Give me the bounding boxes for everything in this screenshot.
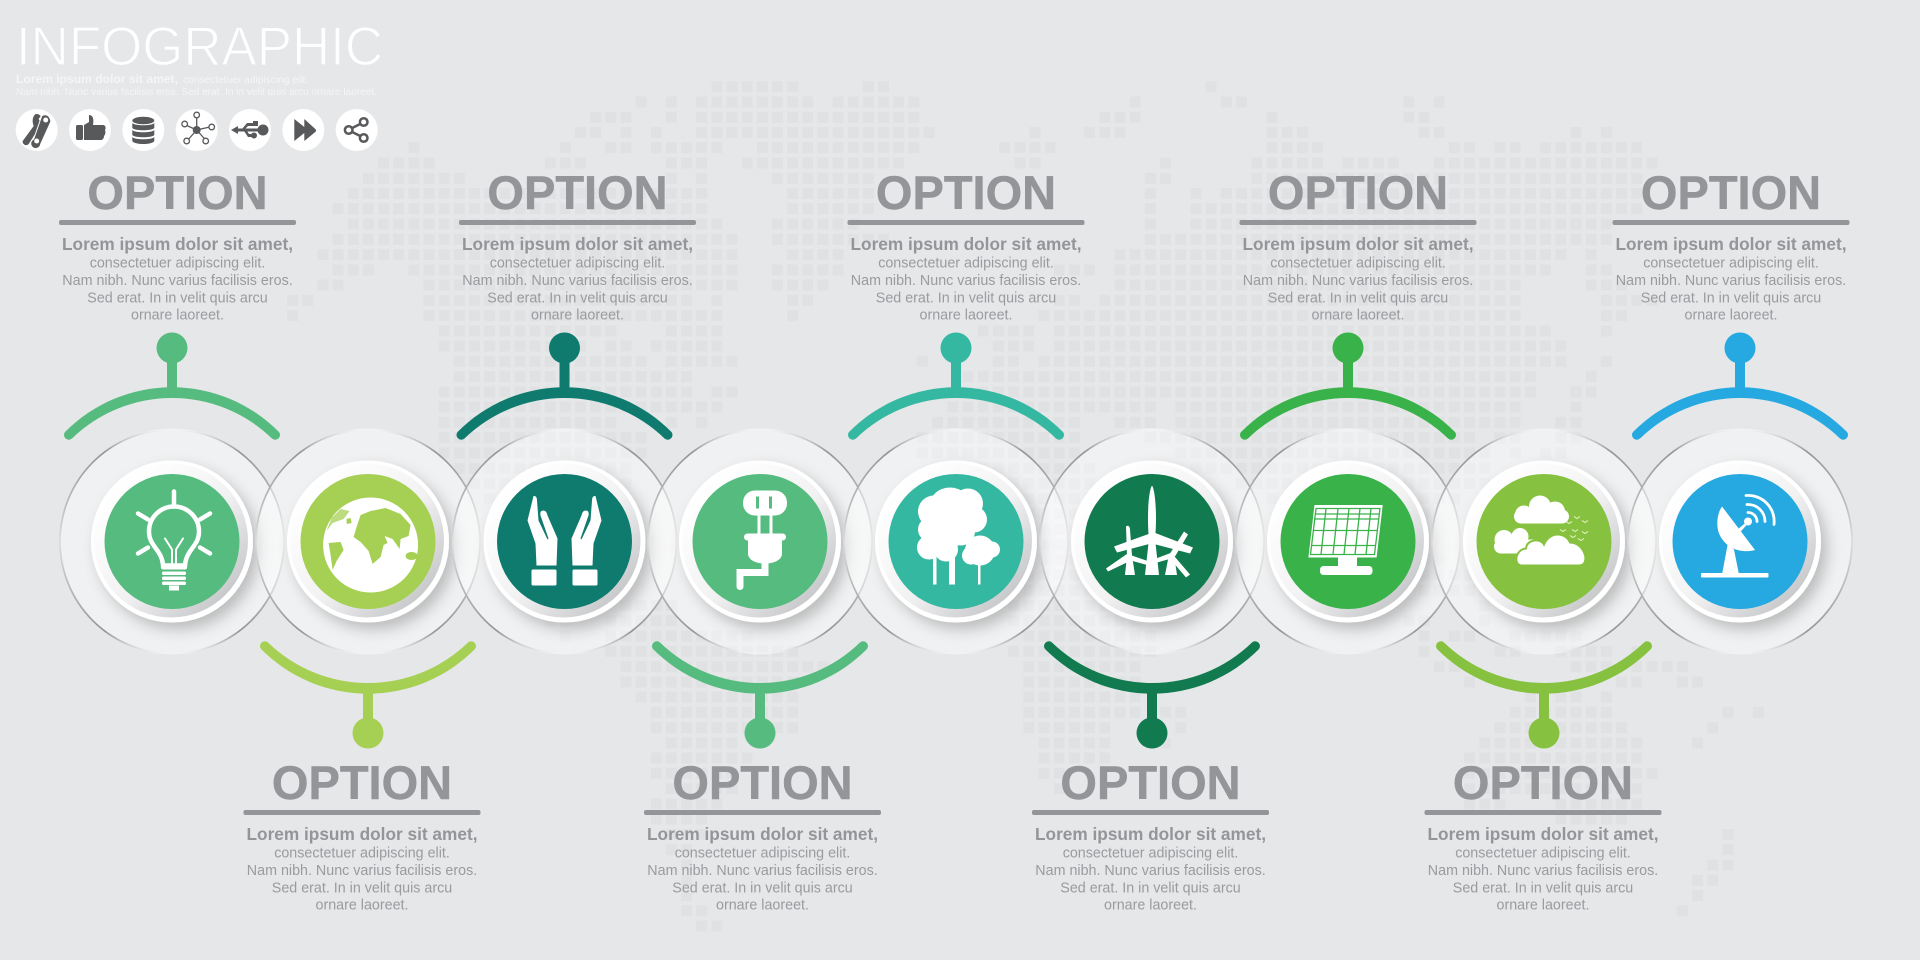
text panel: option 1: consectetuer adipiscing elit. xyxy=(90,256,265,272)
text panel: option 3: consectetuer adipiscing elit. xyxy=(490,256,665,272)
connector: option 3 xyxy=(457,332,672,440)
text panel: option 9: Lorem ipsum dolor sit amet, xyxy=(1616,234,1846,254)
text panel: option 3: ornare laoreet. xyxy=(531,308,624,324)
header icon row xyxy=(16,109,378,151)
text panel: option 4: consectetuer adipiscing elit. xyxy=(675,846,850,862)
text panel: option 2: ornare laoreet. xyxy=(316,898,408,914)
text panel: option 7: Lorem ipsum dolor sit amet, xyxy=(1242,234,1474,254)
text panel: option 7: Nam nibh. Nunc varius facilisis eros. xyxy=(1243,273,1473,289)
icon: tools xyxy=(16,109,58,151)
text panel: option 1: ornare laoreet. xyxy=(131,308,224,324)
text panel: option 2 xyxy=(244,756,480,914)
text panel: option 9: ornare laoreet. xyxy=(1684,308,1778,324)
text panel: option 4: OPTION xyxy=(672,756,853,809)
text panel: option 6: consectetuer adipiscing elit. xyxy=(1063,846,1238,862)
icon: share xyxy=(336,109,378,151)
text panel: option 9: Sed erat. In in velit quis arcu xyxy=(1641,290,1821,306)
text panel: option 2: Nam nibh. Nunc varius facilisis eros. xyxy=(247,863,477,879)
text panel: option 3: Lorem ipsum dolor sit amet, xyxy=(462,234,693,254)
text panel: option 8: Sed erat. In in velit quis arcu xyxy=(1453,880,1633,896)
subtitle: Nam nibh. Nunc varius facilisis eros. Sed erat. In in velit quis arcu ornare laoreet. xyxy=(16,87,377,98)
icon: fast forward xyxy=(282,109,324,151)
subtitle: consectetuer adipiscing elit. xyxy=(183,75,308,86)
text panel: option 5: Nam nibh. Nunc varius facilisis eros. xyxy=(851,273,1081,289)
text panel: option 2: OPTION xyxy=(272,756,452,809)
text panel: option 4 xyxy=(644,756,881,914)
icon: light bulb xyxy=(104,474,240,609)
icon: wind turbines xyxy=(1084,474,1220,609)
text panel: option 1: Sed erat. In in velit quis arcu xyxy=(87,290,268,306)
text panel: option 1: OPTION xyxy=(87,166,268,219)
icon: plug xyxy=(692,474,828,609)
text panel: option 7: OPTION xyxy=(1268,166,1448,219)
text panel: option 7 xyxy=(1240,166,1476,324)
text panel: option 3 xyxy=(459,166,696,324)
text panel: option 2: Sed erat. In in velit quis arcu xyxy=(272,880,452,896)
text panel: option 2: Lorem ipsum dolor sit amet, xyxy=(246,824,478,844)
connector: option 4 xyxy=(652,641,868,748)
text panel: option 8: Nam nibh. Nunc varius facilisis eros. xyxy=(1428,863,1658,879)
text panel: option 4: Nam nibh. Nunc varius facilisis eros. xyxy=(647,863,878,879)
icon: usb xyxy=(229,109,271,151)
icon: hands xyxy=(497,474,632,609)
text panel: option 7: consectetuer adipiscing elit. xyxy=(1270,256,1446,272)
text panel: option 8: consectetuer adipiscing elit. xyxy=(1455,846,1631,862)
text panel: option 8: Lorem ipsum dolor sit amet, xyxy=(1428,824,1658,844)
text panel: option 6 xyxy=(1032,756,1269,914)
text panel: option 8: OPTION xyxy=(1453,756,1633,809)
icon: satellite dish xyxy=(1672,474,1808,609)
icon: thumbs up xyxy=(69,109,111,151)
text panel: option 4: Lorem ipsum dolor sit amet, xyxy=(647,824,878,844)
text panel: option 8: ornare laoreet. xyxy=(1496,898,1590,914)
text panel: option 6: ornare laoreet. xyxy=(1104,898,1197,914)
text panel: option 3: Nam nibh. Nunc varius facilisis eros. xyxy=(462,273,693,289)
icon: network xyxy=(176,109,218,151)
text panel: option 4: ornare laoreet. xyxy=(716,898,809,914)
connector: option 2 xyxy=(260,641,476,748)
connector: option 8 xyxy=(1436,641,1652,748)
connector: option 9 xyxy=(1632,332,1848,440)
text panel: option 5 xyxy=(848,166,1084,324)
subtitle: Lorem ipsum dolor sit amet, xyxy=(16,72,178,86)
text panel: option 5: consectetuer adipiscing elit. xyxy=(878,256,1054,272)
text panel: option 6: Lorem ipsum dolor sit amet, xyxy=(1035,824,1266,844)
subtitle xyxy=(16,72,377,98)
connector: option 1 xyxy=(64,332,280,440)
text panel: option 9: OPTION xyxy=(1641,166,1821,219)
text panel: option 4: Sed erat. In in velit quis arcu xyxy=(672,880,853,896)
connector: option 7 xyxy=(1240,332,1456,440)
text panel: option 9 xyxy=(1612,166,1850,324)
text panel: option 8 xyxy=(1424,756,1662,914)
text panel: option 5: ornare laoreet. xyxy=(920,308,1012,324)
text panel: option 9: consectetuer adipiscing elit. xyxy=(1643,256,1819,272)
text panel: option 2: consectetuer adipiscing elit. xyxy=(274,846,450,862)
text panel: option 1: Lorem ipsum dolor sit amet, xyxy=(62,234,293,254)
text panel: option 6: OPTION xyxy=(1060,756,1241,809)
text panel: option 6: Nam nibh. Nunc varius facilisis eros. xyxy=(1035,863,1266,879)
icon: globe xyxy=(300,474,436,609)
icon: solar panel xyxy=(1280,474,1416,609)
world map dot pattern xyxy=(287,87,1768,926)
text panel: option 5: Sed erat. In in velit quis arcu xyxy=(876,290,1056,306)
text panel: option 1 xyxy=(59,166,296,324)
title: INFOGRAPHIC xyxy=(16,15,383,77)
text panel: option 1: Nam nibh. Nunc varius facilisis eros. xyxy=(62,273,293,289)
icon: clouds and birds xyxy=(1476,474,1612,609)
text panel: option 5: Lorem ipsum dolor sit amet, xyxy=(850,234,1082,254)
icon: database xyxy=(122,109,164,151)
connector: option 5 xyxy=(848,332,1064,440)
icon: trees xyxy=(888,474,1024,609)
text panel: option 9: Nam nibh. Nunc varius facilisis eros. xyxy=(1616,273,1846,289)
text panel: option 3: OPTION xyxy=(487,166,668,219)
text panel: option 3: Sed erat. In in velit quis arcu xyxy=(487,290,668,306)
text panel: option 5: OPTION xyxy=(876,166,1056,219)
text panel: option 6: Sed erat. In in velit quis arcu xyxy=(1060,880,1241,896)
text panel: option 7: Sed erat. In in velit quis arcu xyxy=(1268,290,1448,306)
connector: option 6 xyxy=(1044,641,1260,748)
text panel: option 7: ornare laoreet. xyxy=(1312,308,1404,324)
ring shells xyxy=(60,430,1852,654)
